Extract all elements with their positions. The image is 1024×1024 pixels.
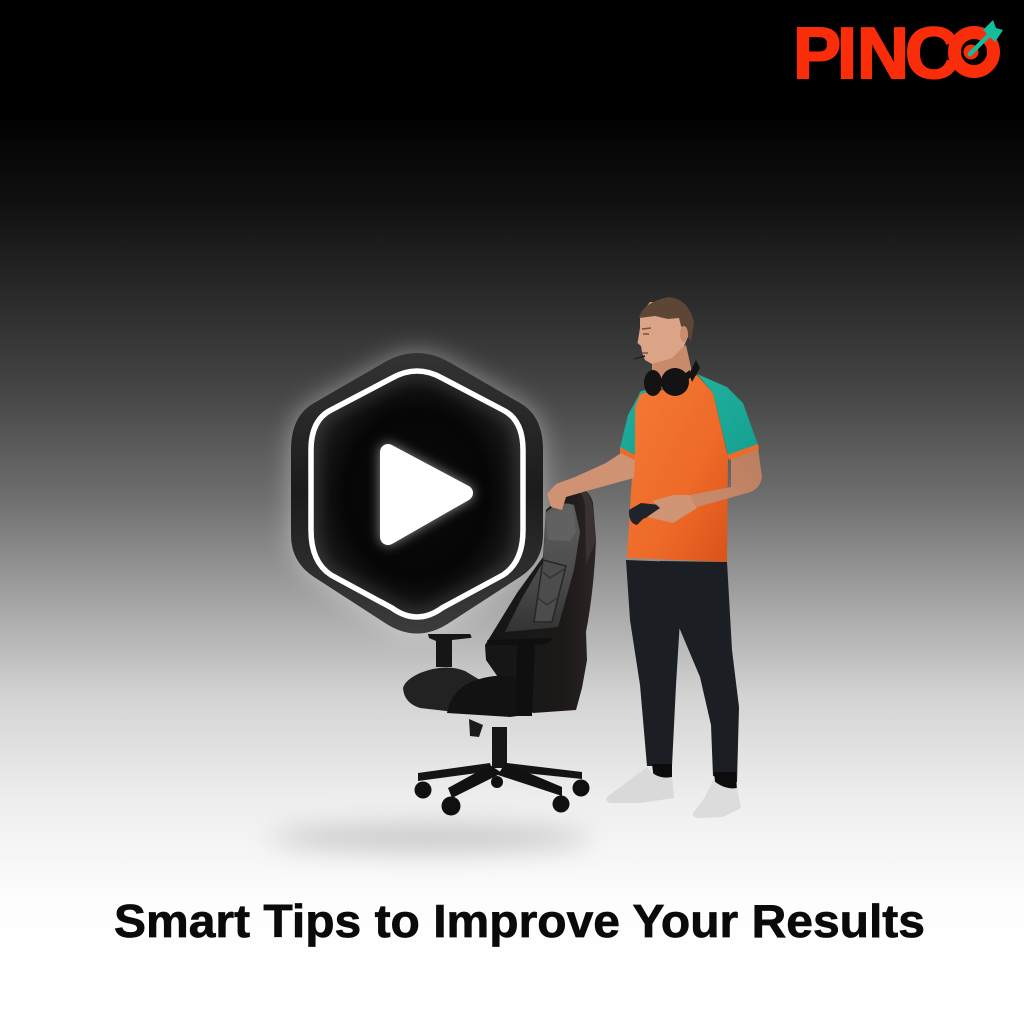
right cuff [727,444,759,460]
shirt body [627,375,728,562]
play triangle [388,452,465,537]
hair [639,297,694,342]
logo: PINCO: C [905,14,959,94]
ear [680,326,688,342]
chair back upholstery [505,504,580,632]
chair chevrons [538,568,566,605]
right shoe [693,780,741,818]
far armrest [428,634,472,667]
chair seat [403,667,480,712]
chair casters [414,776,590,816]
left cuff [620,447,635,460]
right arm [690,448,762,507]
logo target mark [954,20,1003,72]
logo: PINCO: N [857,14,909,94]
right hand [647,495,697,523]
chair headrest [546,505,576,541]
face features [642,328,651,353]
neck [652,345,692,392]
badge outer rim [291,353,543,634]
left leg [626,560,680,766]
logo: PINCO [793,14,1003,94]
title: Smart Tips to Improve Your Results [114,895,925,947]
near armrest [487,638,552,716]
chair centre panel [534,560,566,622]
controller [629,503,662,525]
logo: PINCO: P [793,14,841,94]
left shoe [606,767,674,803]
left arm [547,453,635,510]
badge glow [291,353,543,634]
logo: PINCO: I [837,14,857,94]
socks [652,764,737,792]
person with controller [547,297,762,818]
badge face [311,371,523,617]
headphones [644,360,700,396]
left sleeve [620,388,655,455]
right sleeve [697,374,758,455]
badge white ring [311,371,523,617]
hexagon play badge [291,353,543,634]
head [638,302,693,364]
badge inner glow [311,371,523,617]
play triangle glow [388,452,465,537]
mic [634,356,645,359]
chair base [414,719,590,816]
chair side [447,676,532,717]
right leg [660,561,739,782]
chair strap [575,487,596,565]
gaming chair [403,487,596,816]
floor shadow [270,825,590,851]
logo: PINCO: O [956,20,992,87]
chair backrest [485,487,596,713]
